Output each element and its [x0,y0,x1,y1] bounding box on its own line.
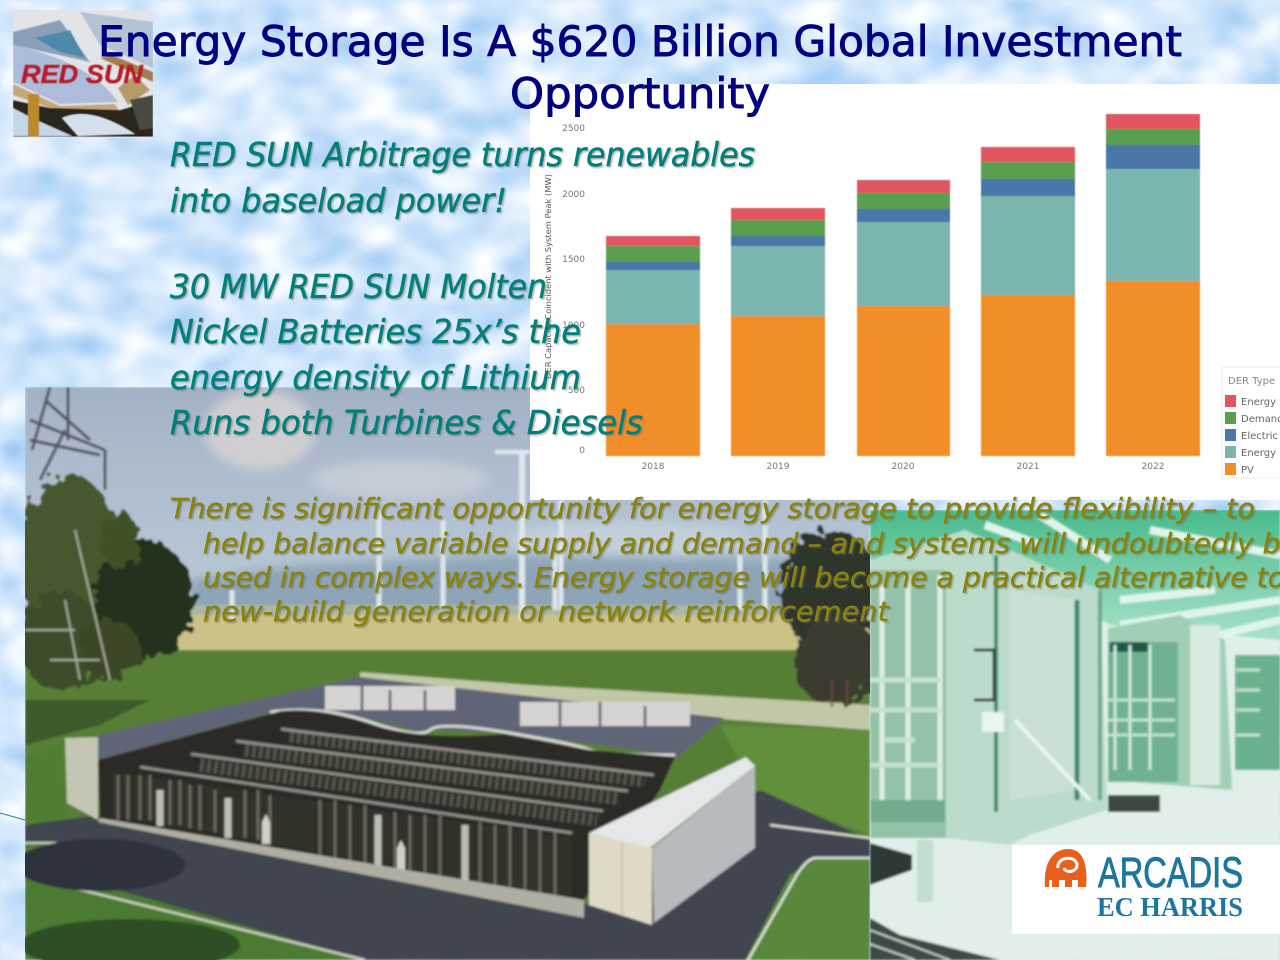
chart panel: DER capacity stacked bars [530,84,1280,500]
legend [1222,367,1280,478]
stray connector line [0,813,25,820]
text block: RED SUN arbitrage claims: RED SUN Arbitrage turns renewables [170,135,755,174]
text block: RED SUN arbitrage claims: 30 MW RED SUN Molten [170,267,547,306]
x axis labels [642,462,1164,472]
text block: energy storage opportunity: new-build generation or network reinforcement [203,595,890,628]
text block: RED SUN arbitrage claims: energy density of Lithium [170,358,581,397]
logo wordmark: RED SUN [21,59,144,89]
pylon [30,387,105,490]
far container [1235,655,1280,770]
photo: battery storage building in a field [15,387,880,960]
text block: RED SUN arbitrage claims: Runs both Turbines & Diesels [170,403,643,442]
y axis labels: 1500 [562,255,585,265]
y axis labels: 2000 [562,190,585,200]
x axis labels: 2021 [1017,462,1039,472]
white end block [589,757,755,848]
roof units [325,686,690,726]
text block: RED SUN arbitrage claims: Nickel Batteries 25x’s the [170,312,581,351]
bar: 2021 [981,147,1075,456]
path strip [360,672,870,730]
trees [18,475,195,690]
racks hall [98,710,675,900]
title [98,17,1182,118]
asphalt [25,790,870,960]
back racks [200,736,645,820]
logo: RED SUN solar dishes [13,10,153,138]
center container [1108,615,1232,790]
legend: PV [1241,465,1254,476]
y axis labels: 1000 [562,321,585,331]
bar: 2020 [857,180,950,456]
photo: battery containers in green tint [870,510,1280,960]
x axis labels: 2018 [642,462,665,472]
text block: energy storage opportunity: used in complex ways. Energy storage will become a practical alternative to [203,561,1280,594]
front racks [112,772,572,897]
text block: energy storage opportunity [170,492,1280,628]
x axis labels: 2019 [767,462,790,472]
y axis labels [562,124,585,456]
row roofs [140,729,654,833]
logo: Arcadis EC Harris [1012,845,1280,934]
bar: 2019 [731,208,825,456]
text block: energy storage opportunity: There is significant opportunity for energy storage to provide flexibility – to [170,492,1255,525]
left wall [65,737,98,820]
text block: energy storage opportunity: help balance variable supply and demand – and systems will undoubtedly be [203,527,1280,560]
legend: DER Type [1228,376,1275,387]
text block: RED SUN arbitrage claims [170,135,755,442]
x axis labels: 2020 [892,462,915,472]
lawns [720,725,870,835]
bar: 2022 [1106,114,1200,456]
y axis labels: 0 [579,446,585,456]
title: Opportunity [510,69,770,118]
turbines [232,500,765,620]
floor grate [870,918,1000,960]
y axis title: DER Capacity Coincident with System Peak (MW) [544,174,553,379]
hall floor [98,818,584,918]
handle [974,650,994,700]
bar: 2018 [606,236,700,456]
y axis labels: 2500 [562,124,585,134]
y axis labels: 500 [568,386,585,396]
roof [84,677,724,760]
icon: orange elephant mark [1045,849,1086,887]
title: Energy Storage Is A $620 Billion Global Investment [98,17,1182,66]
left container [870,530,1107,845]
text block: RED SUN arbitrage claims: into baseload power! [170,181,507,220]
wordmark: EC HARRIS: EC HARRIS [1097,892,1243,922]
x axis labels: 2022 [1142,462,1164,472]
